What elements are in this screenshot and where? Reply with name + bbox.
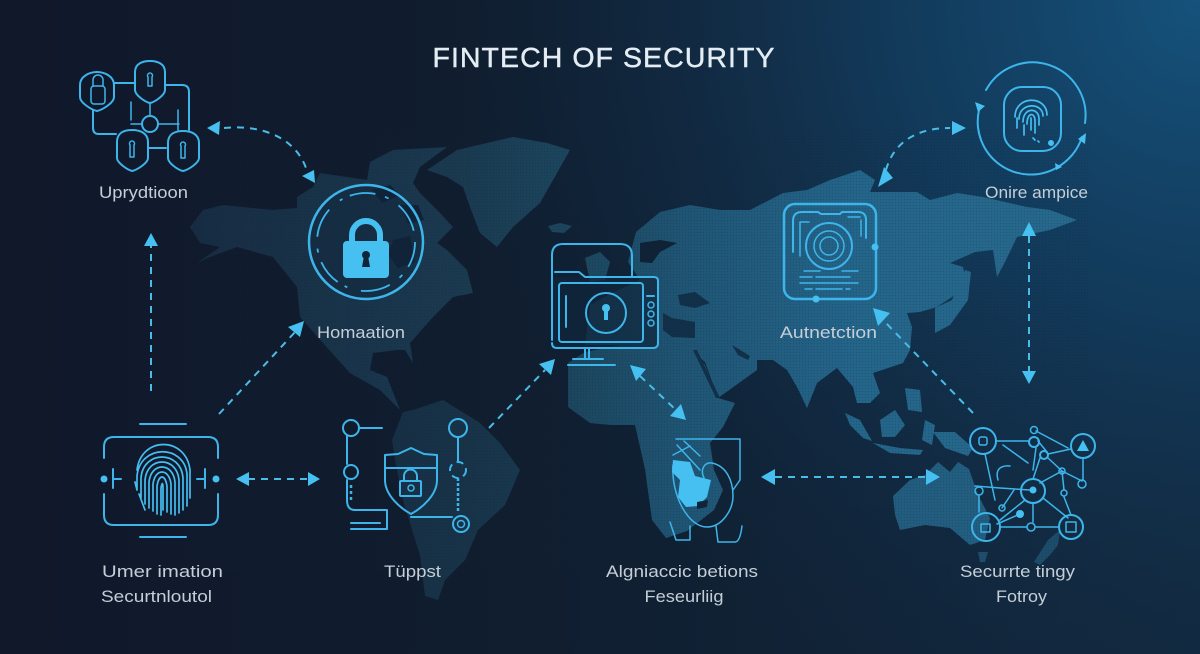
- label: Securrte tingy Fotroy: Fotroy: [996, 587, 1048, 606]
- arrow: face to network: [761, 469, 940, 485]
- title: FINTECH OF SECURITY: [432, 42, 776, 73]
- label: Onire ampice: Onire ampice: [985, 183, 1088, 202]
- arrow: fingerprint up to shield network: [144, 233, 158, 391]
- label: Uprydtioon: Uprydtioon: [99, 183, 188, 202]
- label: Securrte tingy Fotroy: [960, 562, 1076, 606]
- arrow: fingerprint to shield circuit: [236, 472, 320, 486]
- icon: monitor with keyhole: [552, 244, 658, 365]
- icon: biometric scan square: [784, 204, 878, 302]
- label: Tüppst: Tüppst: [384, 562, 441, 581]
- icon: shield circuit: [343, 419, 469, 532]
- arrow: network to scan square: [873, 308, 973, 413]
- icon: shield network: [80, 61, 199, 171]
- icon: padlock in circle: [309, 185, 423, 299]
- label: Umer imation Securtnloutol: Securtnloutol: [101, 587, 212, 606]
- label: Homaation: Homaation: [317, 323, 405, 342]
- arrow: shield circuit to monitor: [489, 359, 555, 428]
- label: Algniaccic betions Feseurliig: Algniaccic betions: [606, 562, 758, 581]
- label: Autnetction: Autnetction: [780, 323, 877, 342]
- arrow: fingerprint to padlock: [219, 321, 304, 414]
- arrow: monitor to face: [630, 365, 686, 420]
- label: Algniaccic betions Feseurliig: Feseurliig: [644, 587, 724, 606]
- arrow: shield network to padlock: [207, 121, 315, 183]
- icon: security network: [970, 426, 1095, 541]
- icon: fingerprint frame: [100, 424, 220, 537]
- label: Algniaccic betions Feseurliig: [606, 562, 758, 606]
- icon: face recognition: [670, 439, 742, 542]
- arrow: scan square to fingerprint circle: [878, 121, 966, 187]
- icon: fingerprint in rotating circle: [975, 62, 1086, 175]
- arrow: fingerprint circle to network: [1022, 222, 1036, 384]
- label: Umer imation Securtnloutol: [101, 562, 223, 606]
- world map: [180, 130, 1090, 600]
- label: Securrte tingy Fotroy: Securrte tingy: [960, 562, 1076, 581]
- label: Umer imation Securtnloutol: Umer imation: [102, 562, 223, 581]
